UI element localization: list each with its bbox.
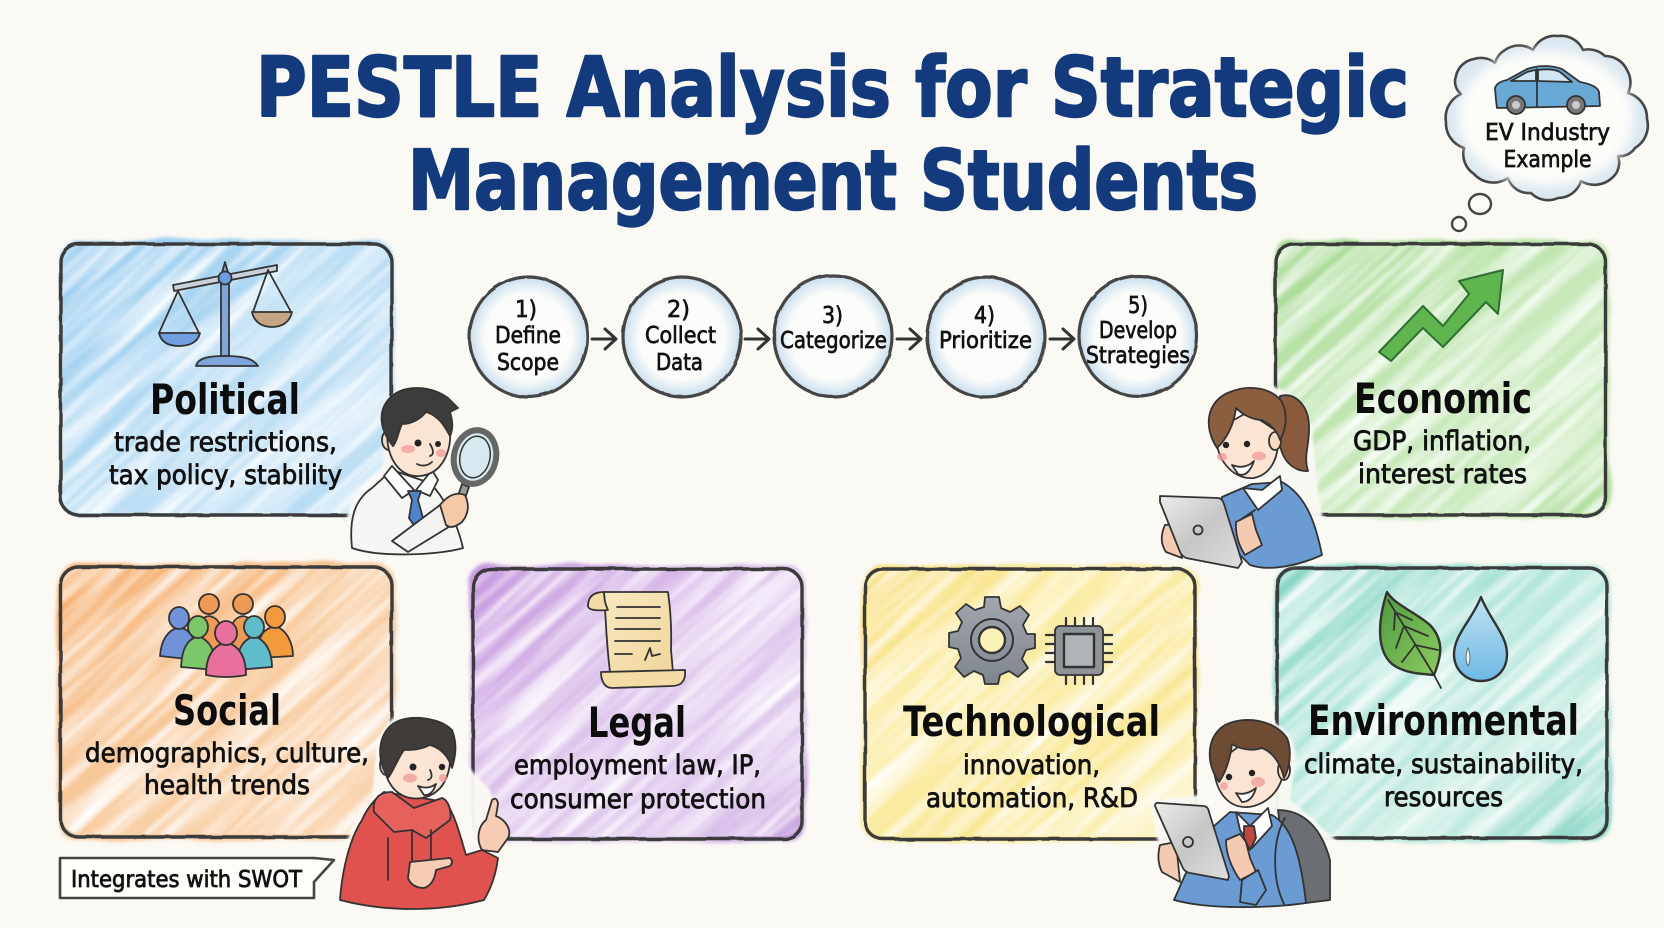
icon: gear and chip — [949, 597, 1112, 684]
step 4: 4) — [974, 303, 995, 329]
icon: group of people — [160, 594, 293, 677]
step 4: Prioritize — [939, 328, 1032, 354]
icon: car — [1495, 66, 1600, 114]
step 3: Categorize — [780, 328, 887, 354]
thought bubble: EV industry example: Example — [1504, 147, 1592, 173]
student: boy with magnifying glass — [345, 382, 501, 560]
icon: balance scale — [159, 262, 292, 366]
step 3 — [774, 276, 892, 396]
step 5: Develop — [1099, 318, 1177, 344]
panel: economic — [1274, 240, 1610, 518]
title — [256, 41, 1409, 229]
text: social factors — [85, 738, 369, 801]
heading: social: Social — [173, 686, 281, 735]
step 2 — [623, 277, 741, 397]
text: social factors: demographics, culture, — [85, 738, 369, 769]
panel: technological — [862, 565, 1198, 842]
step 2: Data — [656, 350, 703, 376]
icon: leaf and water drop — [1380, 592, 1507, 688]
thought bubble: EV industry example — [1446, 36, 1648, 231]
title: Management Students — [408, 134, 1258, 229]
panel: social — [57, 563, 395, 840]
step 1: Define — [495, 323, 561, 349]
text: economic factors: GDP, inflation, — [1353, 426, 1531, 457]
student: boy with tablet and backpack — [1150, 716, 1336, 908]
student: girl with tablet — [1155, 382, 1330, 574]
step 1: 1) — [515, 297, 537, 323]
text: technological factors: innovation, — [963, 750, 1100, 781]
thought bubble: EV industry example: EV Industry — [1485, 120, 1610, 146]
heading: technological: Technological — [903, 697, 1160, 746]
text: social factors: health trends — [144, 770, 310, 801]
process flow: five steps — [470, 276, 1197, 397]
heading: environmental: Environmental — [1308, 696, 1579, 745]
heading: political: Political — [150, 375, 300, 424]
text: environmental factors: climate, sustainability, — [1304, 749, 1583, 780]
text: political factors — [109, 427, 342, 491]
student: boy in red hoodie — [332, 712, 510, 909]
step 1: Scope — [497, 350, 559, 376]
step 4 — [927, 277, 1045, 397]
arrow 3 to 4 — [897, 329, 921, 349]
title: PESTLE Analysis for Strategic — [256, 41, 1409, 136]
text: political factors: trade restrictions, — [114, 427, 337, 458]
step 5: 5) — [1128, 293, 1148, 319]
text: technological factors — [926, 750, 1138, 814]
arrow 2 to 3 — [745, 329, 769, 349]
text: environmental factors: resources — [1384, 782, 1503, 813]
step 5: Strategies — [1086, 343, 1190, 369]
arrow 1 to 2 — [592, 329, 616, 349]
text: legal factors: consumer protection — [510, 784, 766, 815]
text: economic factors — [1353, 426, 1531, 490]
text: economic factors: interest rates — [1358, 459, 1527, 490]
text: political factors: tax policy, stability — [109, 460, 342, 491]
text: technological factors: automation, R&D — [926, 783, 1138, 814]
panel: legal — [470, 565, 806, 842]
panel: environmental — [1274, 564, 1610, 842]
heading: legal: Legal — [588, 698, 686, 747]
step 5 — [1079, 276, 1197, 396]
text: legal factors: employment law, IP, — [514, 750, 761, 781]
step 2: Collect — [645, 323, 716, 349]
step 1 — [470, 277, 588, 397]
step 2: 2) — [667, 297, 690, 323]
panel: political — [60, 240, 394, 516]
text: legal factors — [510, 750, 766, 815]
arrow 4 to 5 — [1050, 329, 1074, 349]
icon: legal scroll — [588, 592, 685, 688]
icon: rising arrow — [1379, 270, 1503, 361]
callout: integrates with SWOT — [60, 858, 334, 898]
step 3: 3) — [822, 303, 843, 329]
text: environmental factors — [1304, 749, 1583, 813]
heading: economic: Economic — [1354, 374, 1532, 423]
callout: integrates with SWOT: Integrates with SWOT — [71, 867, 303, 893]
